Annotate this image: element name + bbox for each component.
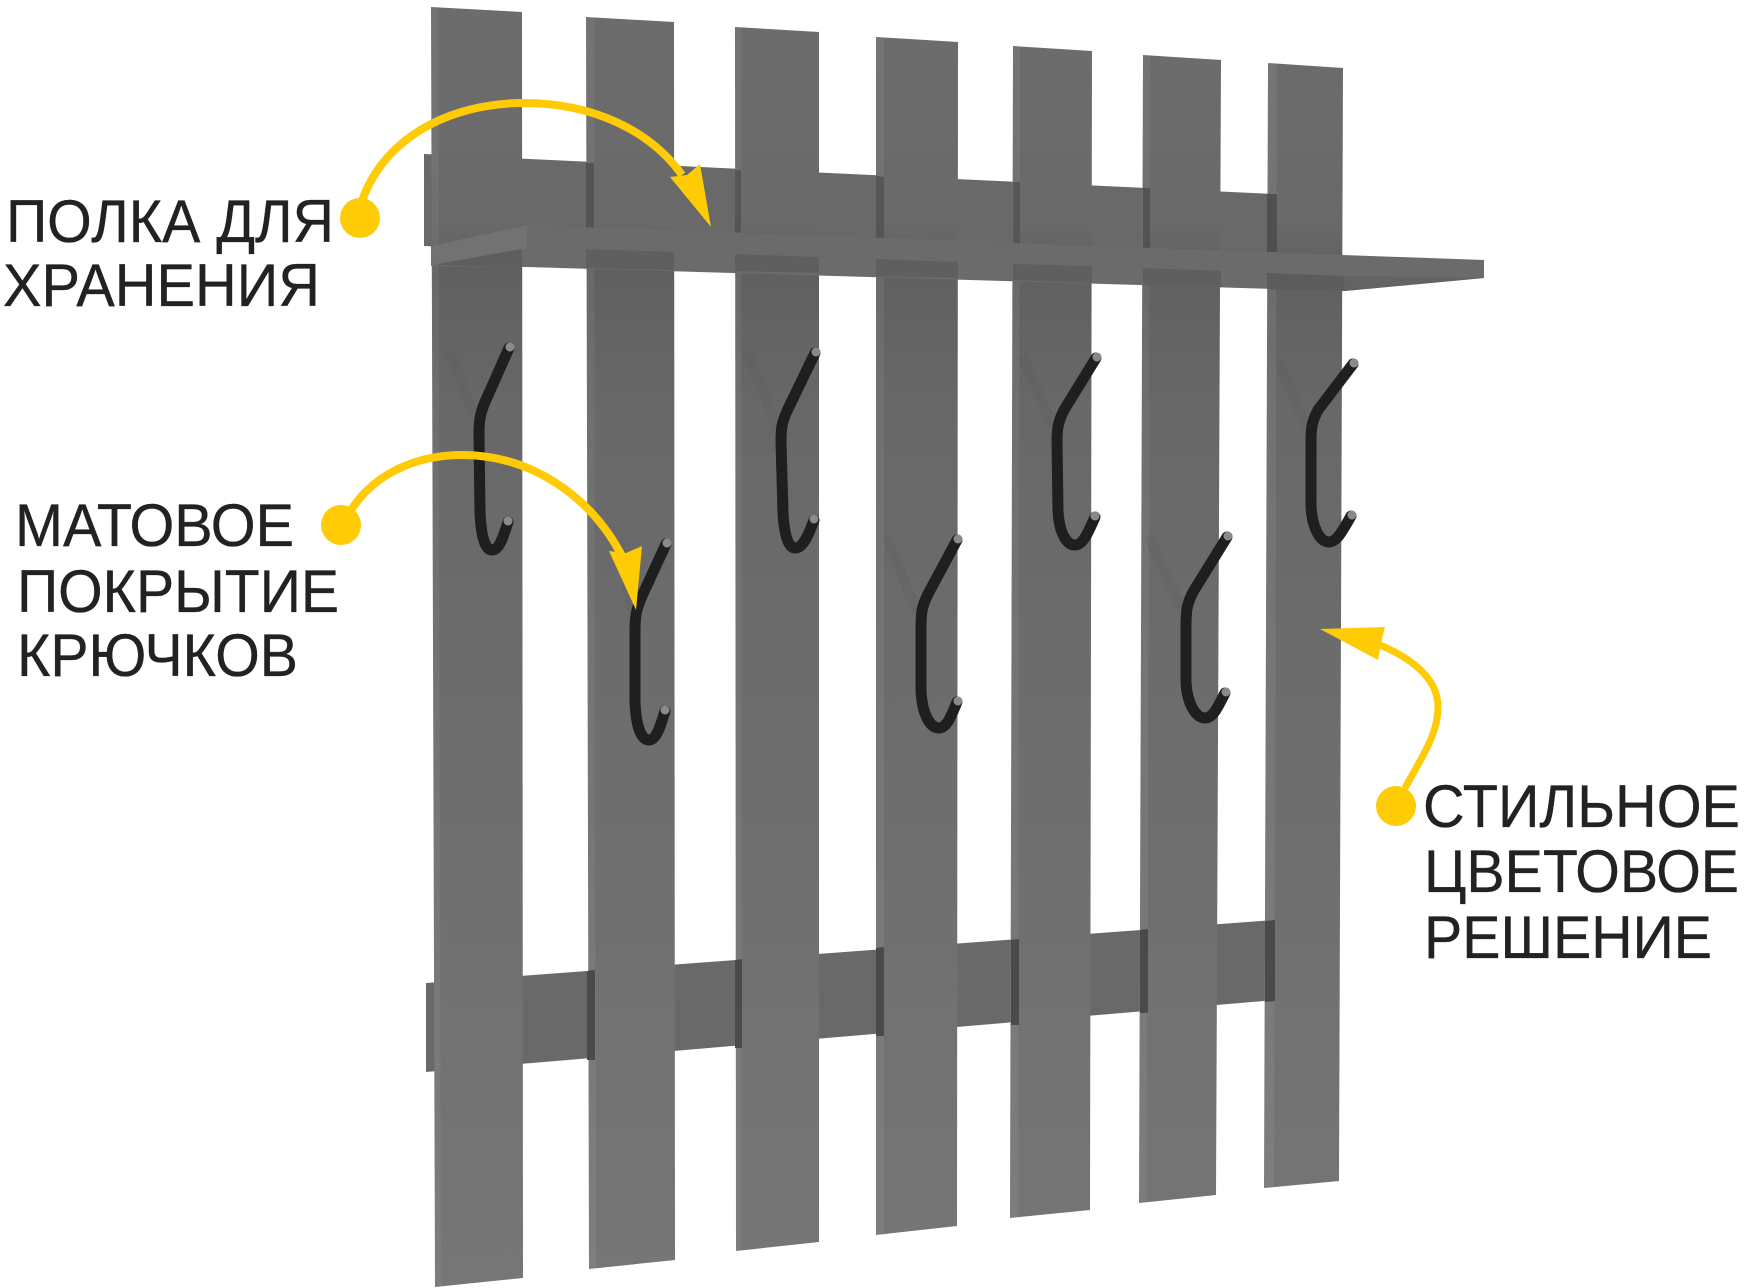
label: shelf: ХРАНЕНИЯ <box>3 252 320 319</box>
hook 3 <box>781 348 820 548</box>
arrow: hook coating callout <box>321 455 642 610</box>
label: colour: РЕШЕНИЕ <box>1424 904 1712 971</box>
arrow: colour callout <box>1320 627 1438 826</box>
label: colour: СТИЛЬНОЕ <box>1423 773 1740 840</box>
slat 4 <box>876 37 958 1235</box>
lower crossbar <box>426 920 1275 1072</box>
label: matte hooks: МАТОВОЕ <box>15 492 294 559</box>
hook 2 <box>635 538 672 740</box>
hook 1 <box>479 342 514 550</box>
upper crossbar <box>424 154 1338 290</box>
label: colour <box>1423 773 1740 971</box>
hooks <box>479 342 1358 740</box>
slat 2 <box>586 17 675 1269</box>
arrow: shelf callout <box>340 103 711 238</box>
slat 7 <box>1264 63 1343 1188</box>
label: matte hooks <box>15 492 339 689</box>
label: shelf: ПОЛКА ДЛЯ <box>6 188 334 255</box>
label: matte hooks: КРЮЧКОВ <box>17 622 298 689</box>
slat 5 <box>1010 46 1092 1218</box>
hook 7 <box>1311 358 1358 542</box>
shelf <box>431 225 1484 291</box>
slats <box>431 7 1343 1287</box>
hook 6 <box>1186 532 1232 718</box>
label: matte hooks: ПОКРЫТИЕ <box>17 558 339 625</box>
crossbar shadows on slats <box>586 163 1277 1060</box>
label: shelf <box>3 188 334 319</box>
slat 3 <box>735 27 819 1251</box>
label: colour: ЦВЕТОВОЕ <box>1424 838 1739 905</box>
hook 4 <box>921 534 962 728</box>
slat 6 <box>1139 55 1221 1203</box>
hook shadows <box>450 352 1305 610</box>
hook 5 <box>1057 352 1102 545</box>
slat 1 <box>431 7 523 1287</box>
